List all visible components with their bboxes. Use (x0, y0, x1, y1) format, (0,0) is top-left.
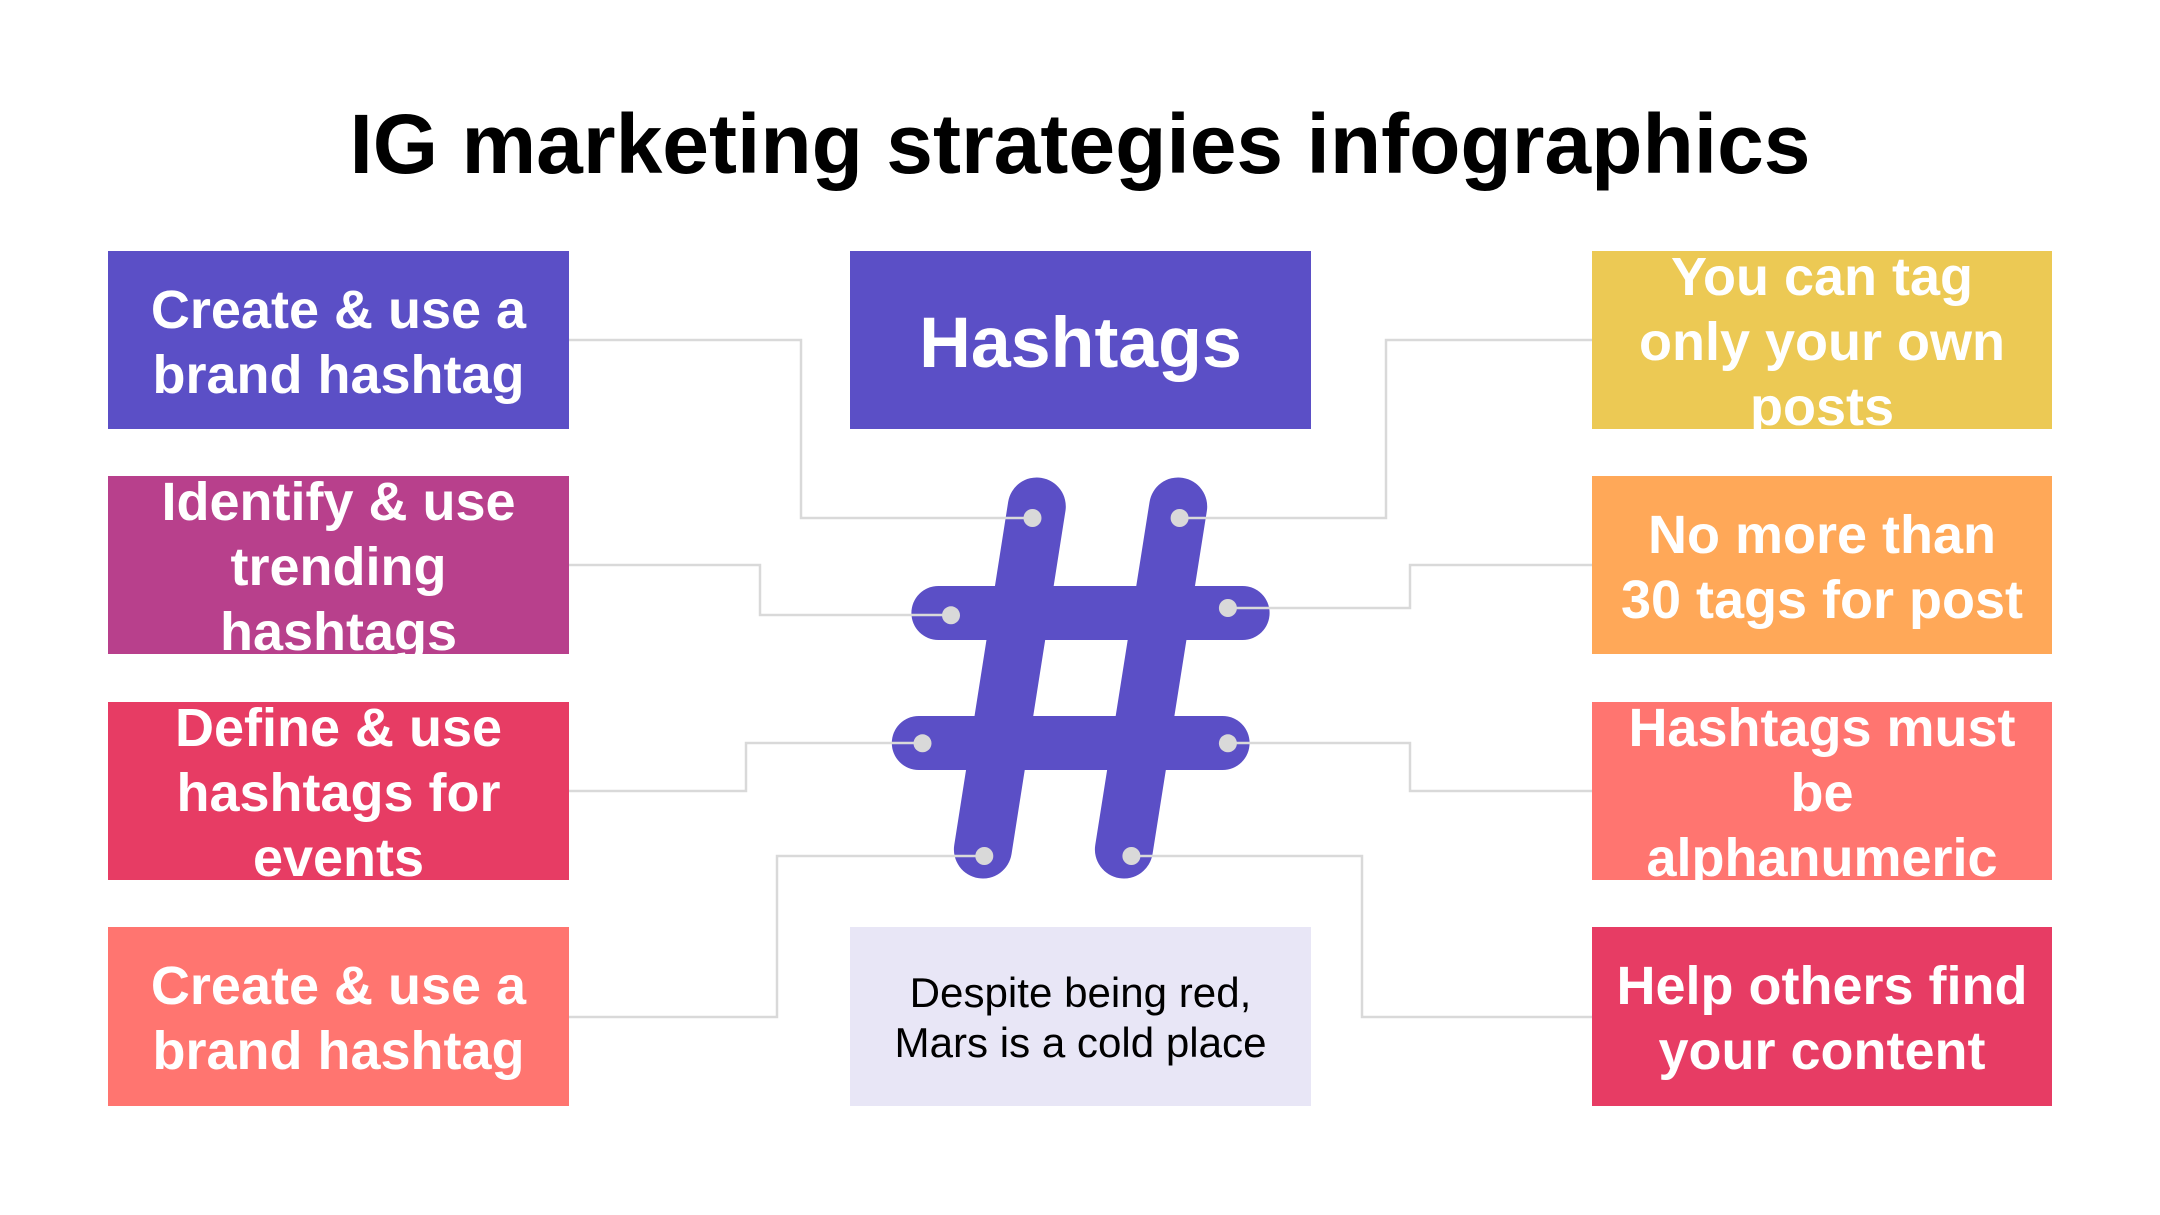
panel: right 3 (1592, 702, 2052, 880)
panel: center note (850, 927, 1311, 1106)
connector lines (569, 340, 1592, 1017)
panel: right 1 (1592, 251, 2052, 429)
panel: left 2: trending (230, 537, 446, 597)
panel: center note: Mars is a cold place (894, 1019, 1266, 1066)
panel: right 1: only your own (1639, 312, 2005, 372)
panel: right 2: No more than (1648, 504, 1996, 564)
title: IG marketing strategies infographics (349, 97, 1811, 191)
connector dots (914, 509, 1237, 865)
panel: right 4 (1592, 927, 2052, 1106)
panel: left 1: brand hashtag (152, 344, 525, 404)
panel: left 4: brand hashtag (152, 1021, 525, 1081)
panel: right 4: your content (1658, 1021, 1986, 1081)
panel: right 2 (1592, 476, 2052, 654)
panel: center note: Despite being red, (910, 969, 1251, 1016)
panel: left 1: Create & use a (151, 280, 526, 340)
panel: left 1 (108, 251, 569, 429)
panel: left 3: hashtags for (176, 763, 501, 823)
panel: left 4 (108, 927, 569, 1106)
panel: center heading Hashtags: Hashtags (919, 303, 1242, 383)
panel: right 3: be (1790, 763, 1854, 823)
icon: hash symbol (919, 506, 1243, 850)
panel: right 2: 30 tags for post (1621, 570, 2023, 630)
panel: right 4: Help others find (1616, 956, 2028, 1016)
panel: left 4: Create & use a (151, 956, 526, 1016)
panel: center heading Hashtags (850, 251, 1311, 429)
panel: left 3 (108, 702, 569, 880)
panel: left 2 (108, 476, 569, 654)
